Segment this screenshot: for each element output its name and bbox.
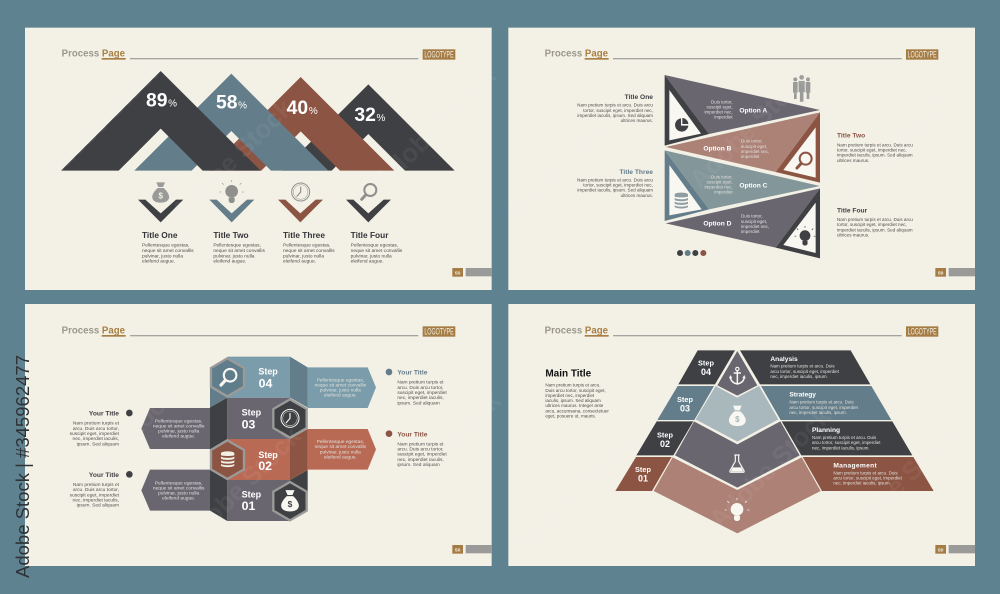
text block: your title upper left: Nam pretium turpis et [73, 421, 120, 427]
text block: your title brown: ipsum. Sed aliquam [397, 462, 440, 468]
band: planning: nec, imperdiet iaculis, ipsum. [812, 445, 870, 450]
band: strategy: Nam pretium turpis et arcu. Duis [789, 400, 854, 405]
option B triangle: suscipit eget, [741, 144, 767, 149]
level: step 03: 03 [680, 404, 690, 414]
arrow: step 01 description: neque sit amet convallis [153, 485, 205, 491]
band: planning [782, 421, 912, 455]
text block: your title upper left: arcu. Duis arcu tortor, [73, 426, 119, 432]
item: title three: pulvinar, justo nulla [283, 253, 324, 259]
text block: your title upper left: Your Title [89, 411, 119, 418]
chevron: 89 percent [61, 71, 261, 171]
band: analysis: Analysis [770, 356, 798, 363]
arrow: step 01 description [141, 470, 210, 511]
icon: anchor [729, 367, 746, 384]
faint diagonal stock watermarks: Adobe Stock [833, 415, 967, 549]
text block: your title brown [386, 430, 447, 468]
level: step 03: Step [677, 395, 693, 404]
text block: your title brown: suscipit eget, imperdiet [397, 452, 447, 458]
step 02 block: 02 [258, 459, 272, 473]
text block: title three: imperdiet iaculis, ipsum. Sed aliquam [577, 188, 653, 193]
text block: title four: tortor, suscipit eget, imperdiet nec, [837, 222, 907, 227]
header: process page [62, 49, 455, 60]
text block: title one: imperdiet iaculis, ipsum. Sed aliquam [577, 113, 653, 118]
step 03 block: 03 [242, 417, 256, 431]
header: process page: Process Page [62, 326, 126, 337]
item: title three: eleifend augue. [283, 259, 316, 265]
band: planning: Nam pretium turpis et arcu. Duis [812, 435, 877, 440]
option A triangle: Option A [739, 108, 767, 115]
header: process page: LOGOTYPE [424, 50, 454, 60]
centre segment: flask [675, 421, 800, 488]
option D triangle: Option D [703, 221, 732, 228]
centre segment: anchor [717, 351, 757, 396]
text block: your title brown: arcu. Duis arcu tortor, [397, 446, 443, 452]
band: management: Nam pretium turpis et arcu. Duis [833, 470, 898, 475]
band: strategy: nec, imperdiet iaculis, ipsum. [789, 410, 847, 415]
arrow: step 03 description: eleifend augue. [162, 434, 195, 440]
text block: your title lower left: nec, imperdiet iaculis, [73, 497, 119, 503]
step 01 block [210, 470, 308, 521]
option A triangle: suscipit eget, [706, 104, 733, 109]
page number [452, 545, 492, 554]
stock watermark caption: Adobe Stock | #345962477 [13, 355, 33, 578]
text block: your title lower left: ipsum. Sed aliquam [77, 503, 119, 509]
arrow: step 01 description: pulvinar, justo nulla [158, 491, 200, 497]
page number: 50 [455, 270, 461, 276]
panel: process page with option triangles [508, 28, 975, 290]
band: analysis: nec, imperdiet iaculis, ipsum. [770, 374, 828, 379]
option B triangle: imperdiet [741, 154, 760, 159]
text block: your title lower left: Nam pretium turpis et [73, 482, 120, 488]
step 04 block: 04 [259, 376, 273, 390]
band: planning: arcu tortor, suscipit eget, imperdiet [812, 440, 881, 445]
step 02 block: Step [258, 450, 278, 460]
text block: your title blue: suscipit eget, imperdiet [397, 390, 447, 396]
icon: magnifier [362, 184, 376, 199]
faint diagonal stock watermarks: Adobe Stock [823, 85, 957, 219]
value: 40 percent: 40% [287, 98, 318, 119]
arrow: step 04 description [308, 367, 376, 408]
faint diagonal stock watermarks: Adobe Stock [368, 60, 502, 194]
option C triangle: imperdiet [714, 190, 733, 195]
band: analysis: Nam pretium turpis et arcu. Duis [770, 364, 835, 369]
faint diagonal stock watermarks: Adobe Stock [165, 92, 299, 226]
level: step 02 [636, 421, 693, 455]
faint diagonal stock watermarks [35, 52, 967, 559]
item: title two: Title Two [213, 230, 249, 240]
chevron: 32 percent [282, 84, 455, 171]
item: title four: eleifend augue. [351, 259, 384, 265]
item: title four: pulvinar, justo nulla [351, 253, 392, 259]
icon: light bulb [725, 498, 749, 521]
option B triangle: imperdiet nec, [741, 149, 769, 154]
header: process page: LOGOTYPE [424, 327, 454, 337]
faint diagonal stock watermarks: Adobe Stock [173, 420, 307, 554]
header: process page [545, 49, 938, 60]
option C triangle: Option C [739, 183, 768, 190]
arrow: step 02 description: eleifend augue. [324, 454, 357, 460]
text block: main title: Main Title [545, 369, 592, 380]
faint diagonal stock watermarks: Adobe Stock [703, 400, 837, 534]
band: analysis: arcu tortor, suscipit eget, imperdiet [770, 369, 840, 374]
icon: light bulb [795, 226, 815, 246]
step 01 block: Step [242, 489, 262, 499]
header: process page: LOGOTYPE [908, 50, 937, 60]
icon: coin stack [221, 451, 234, 467]
step 03 block: Step [242, 408, 262, 418]
text block: main title: eget, posuere ut, mauris. [545, 413, 596, 418]
page number: 50 [938, 547, 944, 553]
icon: pie chart [675, 118, 688, 132]
text block: title two: ultrices maurus. [837, 158, 869, 163]
text block: your title upper left: nec, imperdiet iaculis, [73, 436, 119, 442]
item: title one: neque sit amet convallis [142, 248, 194, 254]
text block: your title upper left: suscipit eget, imperdiet [70, 431, 120, 437]
text block: your title upper left: ipsum. Sed aliquam [77, 441, 119, 447]
text block: title three [577, 169, 653, 198]
item: title one: Pellentesque egestas, [142, 243, 190, 249]
text block: your title blue: ipsum. Sed aliquam [397, 400, 440, 406]
item: title one [138, 182, 194, 265]
text block: title two: imperdiet iaculis, ipsum. Sed aliquam [837, 153, 913, 158]
text block: title one: Title One [625, 94, 653, 101]
text block: your title lower left [70, 471, 133, 509]
band: strategy [761, 386, 891, 420]
diagram: pyramid [615, 350, 934, 533]
text block: title two [837, 133, 913, 163]
item: title one: pulvinar, justo nulla [142, 253, 183, 259]
arrow: step 04 description: neque sit amet convallis [315, 382, 367, 388]
text block: title three: ultrices maurus. [621, 193, 653, 198]
hexagon: clock for step 03 [273, 399, 307, 438]
centre segment: money bag [696, 386, 778, 442]
value: 58 percent: 58% [216, 92, 247, 113]
text block: main title: arcu, accumsana, consectetuer [545, 408, 609, 413]
level: step 04: Step [698, 358, 714, 367]
option A triangle: Duis tortor, [711, 99, 733, 104]
item: title three [278, 183, 335, 265]
option B triangle: Option B [703, 146, 732, 153]
level: step 04: 04 [701, 367, 711, 377]
level: step 01 [615, 457, 672, 491]
text block: your title blue: nec, imperdiet iaculis, [397, 395, 444, 401]
icon: magnifier [797, 153, 812, 168]
page number: 50 [938, 270, 944, 276]
header: process page [62, 326, 455, 337]
option C triangle [665, 150, 820, 221]
item: title four: neque sit amet convallis [351, 248, 403, 254]
header: process page: Process Page [62, 49, 126, 60]
band: management: nec, imperdiet iaculis, ipsum. [833, 481, 891, 486]
item: title two: neque sit amet convallis [213, 248, 265, 254]
chevron marker [138, 200, 183, 222]
arrow: step 03 description: Pellentesque egestas, [155, 418, 202, 424]
level: step 02: Step [657, 430, 673, 439]
option C triangle: imperdiet nec, [704, 185, 733, 190]
text block: main title: iaculis, ipsum. Sed aliquam [545, 398, 601, 403]
text block: title one: ultrices maurus. [621, 118, 653, 123]
text block: your title lower left: Your Title [89, 472, 119, 479]
band: strategy: Strategy [789, 392, 816, 399]
band: management: arcu tortor, suscipit eget, imperdiet [833, 475, 903, 480]
option C triangle: suscipit eget, [706, 179, 733, 184]
text block: title three: Title Three [619, 169, 653, 176]
arrow: step 02 description: pulvinar, justo nulla [320, 449, 361, 455]
chart: interlocking option triangles [665, 75, 820, 258]
item: title three: neque sit amet convallis [283, 248, 335, 254]
band: planning: Planning [812, 427, 840, 434]
item: title two: eleifend augue. [213, 259, 246, 265]
chevron marker [209, 200, 254, 222]
item: title three: Title Three [283, 230, 325, 240]
text block: main title: Duis arcu tortor, suscipit eget, [545, 388, 606, 393]
item: title four [346, 184, 403, 265]
text block: title two: tortor, suscipit eget, imperdiet nec, [837, 147, 907, 152]
option B triangle: Duis tortor, [741, 139, 763, 144]
item: title one: Title One [142, 230, 178, 240]
text block: your title blue: Your Title [397, 370, 428, 377]
icon: money bag: $ [735, 415, 740, 424]
chevron marker [278, 200, 323, 222]
text block: title four: ultrices maurus. [837, 232, 869, 237]
panel: process page with hexagon steps [25, 304, 492, 566]
icon: light bulb [219, 180, 244, 203]
value: 32 percent: 32% [354, 105, 385, 126]
value: 89 percent: 89% [146, 91, 177, 112]
faint diagonal stock watermarks: Adobe Stock [508, 425, 642, 559]
step 04 block: Step [258, 367, 278, 377]
header: process page: LOGOTYPE [908, 327, 937, 337]
level: step 02: 02 [660, 439, 670, 449]
option A triangle: imperdiet nec, [704, 110, 733, 115]
arrow: step 01 description: Pellentesque egestas, [155, 480, 202, 486]
arrow: step 04 description: eleifend augue. [324, 393, 357, 399]
text block: your title lower left: arcu. Duis arcu tortor, [73, 487, 119, 493]
faint diagonal stock watermarks: Adobe Stock [498, 95, 632, 229]
icon: magnifier [221, 369, 236, 385]
arrow: step 02 description: Pellentesque egestas, [317, 439, 364, 445]
text block: title one: tortor, suscipit eget, imperdiet nec, [583, 108, 653, 113]
text block: title one [577, 94, 653, 123]
text block: main title: imperdiet nec, imperdiet [545, 393, 595, 398]
band: strategy: arcu tortor, suscipit eget, imperdiet [789, 405, 859, 410]
item: title two: Pellentesque egestas, [213, 243, 261, 249]
text block: your title upper left [70, 410, 133, 447]
item: title three: Pellentesque egestas, [283, 243, 331, 249]
icon: money bag: $ [158, 192, 163, 201]
text block: main title: Nam pretium turpis et arcu. [545, 383, 601, 388]
chart: overlapping percentage chevrons [61, 71, 455, 171]
icon: clock [292, 183, 310, 201]
level: step 01: 01 [638, 473, 648, 483]
option A triangle: imperdiet [714, 115, 733, 120]
arrow: step 02 description [308, 429, 376, 470]
arrow: step 04 description: Pellentesque egestas, [317, 377, 364, 383]
panel: process page with mountain chevrons [25, 28, 492, 290]
band: analysis [740, 350, 870, 384]
text block: your title blue: arcu. Duis arcu tortor, [397, 385, 443, 391]
panel: process page with pyramid [508, 304, 975, 566]
item: title four: Pellentesque egestas, [351, 243, 398, 249]
text block: main title [545, 369, 609, 418]
text block: title two: Title Two [837, 133, 865, 140]
chevron: 58 percent [134, 74, 328, 171]
option D triangle [666, 188, 820, 258]
text block: title three: Nam pretium turpis et arcu. Duis arcu [577, 177, 653, 182]
page number [935, 545, 975, 554]
item: title two [209, 180, 265, 265]
text block: title two: Nam pretium turpis et arcu. Duis arcu [837, 142, 913, 147]
chevron marker [346, 200, 391, 222]
icon: flask [730, 455, 744, 472]
faint diagonal stock watermarks: Adobe Stock [373, 385, 507, 519]
arrow: step 03 description: pulvinar, justo nulla [158, 429, 200, 435]
step 01 block: 01 [242, 499, 256, 513]
text block: main title: ultrices maurus. Integer ante [545, 403, 604, 408]
band: management [803, 457, 934, 491]
text block: your title brown: Nam pretium turpis et [397, 441, 444, 447]
step 03 block [210, 398, 290, 449]
arrow: step 04 description: pulvinar, justo nulla [320, 388, 361, 394]
option D triangle: imperdiet nec, [741, 224, 769, 229]
legend dots [677, 250, 706, 256]
text block: title four [837, 208, 913, 237]
header: process page: Process Page [545, 326, 609, 337]
chevron: 40 percent [207, 77, 394, 171]
faint diagonal stock watermarks: Adobe Stock [48, 380, 182, 514]
item: title four: Title Four [351, 230, 389, 240]
centre segment: light bulb [654, 457, 821, 533]
text block: your title brown: Your Title [397, 431, 428, 438]
option B triangle [666, 112, 820, 183]
option D triangle: Duis tortor, [741, 214, 763, 219]
icon: money bag: $ [288, 499, 293, 509]
text block: your title brown: nec, imperdiet iaculis, [397, 457, 444, 463]
icon: group of people [793, 75, 810, 102]
text block: your title blue [386, 369, 447, 406]
band: management: Management [833, 462, 877, 469]
step 02 block [211, 429, 308, 480]
item: title one: eleifend augue. [142, 259, 175, 265]
faint diagonal stock watermarks: Adobe Stock [35, 52, 169, 186]
header: process page: Process Page [545, 49, 609, 60]
text block: title four: Title Four [837, 208, 868, 215]
item: title two: pulvinar, justo nulla [213, 253, 255, 259]
step 04 block [210, 357, 308, 408]
text block: title three: tortor, suscipit eget, imperdiet nec, [583, 182, 653, 187]
text block: your title lower left: suscipit eget, imperdiet [70, 492, 120, 498]
arrow: step 01 description: eleifend augue. [162, 496, 195, 502]
option D triangle: suscipit eget, [741, 219, 767, 224]
text block: title one: Nam pretium turpis et arcu. Duis arcu [577, 103, 653, 108]
page number [452, 268, 492, 277]
arrow: step 02 description: neque sit amet convallis [315, 444, 367, 450]
icon: clock [281, 409, 299, 427]
page number [935, 268, 975, 277]
option C triangle: Duis tortor, [711, 174, 733, 179]
header: process page [545, 326, 938, 337]
diagram: stacked hexagon steps [141, 357, 376, 521]
level: step 03 [657, 386, 714, 420]
text block: your title blue: Nam pretium turpis et [397, 380, 444, 386]
text block: title four: imperdiet iaculis, ipsum. Sed aliquam [837, 227, 913, 232]
arrow: step 03 description [141, 408, 210, 449]
level: step 01: Step [635, 465, 651, 474]
faint diagonal stock watermarks: Adobe Stock [683, 60, 817, 194]
text block: title four: Nam pretium turpis et arcu. Duis arcu [837, 217, 913, 222]
page number: 50 [455, 547, 461, 553]
icon: coin stack [675, 193, 688, 208]
level: step 04 [678, 350, 735, 384]
arrow: step 03 description: neque sit amet convallis [153, 423, 205, 429]
option D triangle: imperdiet [741, 229, 760, 234]
option A triangle [665, 75, 820, 146]
